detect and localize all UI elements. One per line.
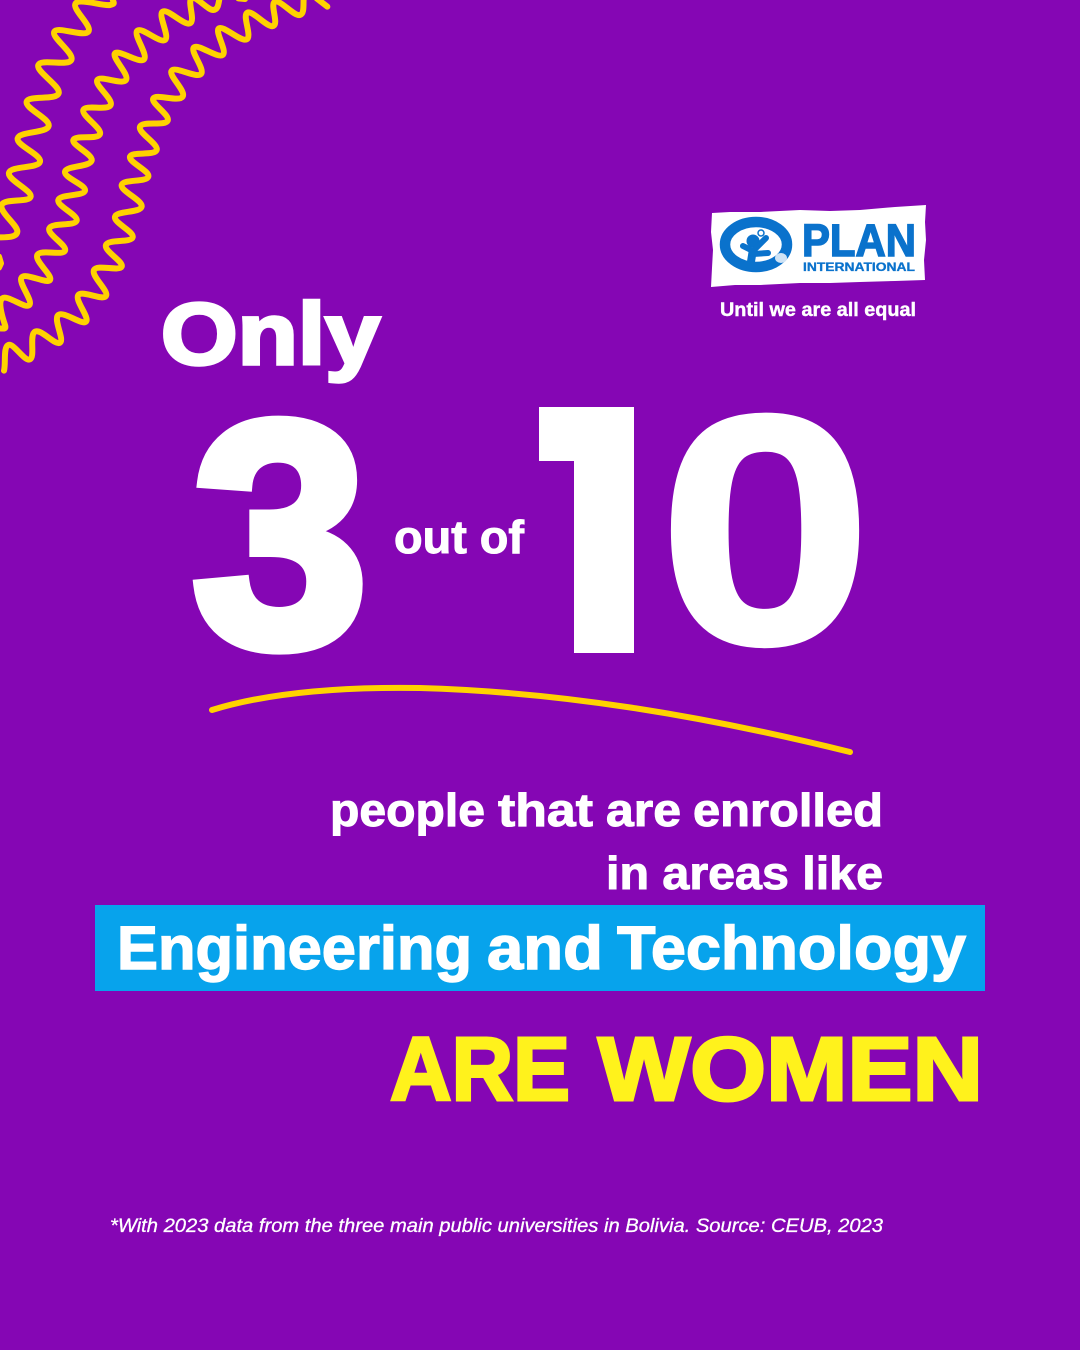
logo wordmark PLAN: PLAN	[802, 215, 916, 266]
conclusion: ARE WOMEN	[390, 1020, 983, 1120]
source footnote: *With 2023 data from the three main public universities in Bolivia. Source: CEUB, 2023	[110, 1215, 883, 1237]
subheading line 1: people	[330, 784, 485, 836]
logo tagline: Until we are all equal	[720, 300, 916, 321]
subheading line 1: that	[498, 784, 593, 836]
heading: Only: Only	[161, 286, 380, 383]
big number 1: 1	[444, 340, 751, 726]
subheading line 2: in areas like	[606, 847, 883, 899]
logo white torn background	[711, 205, 926, 287]
subheading line 1	[330, 784, 883, 836]
logo emblem ring and child	[725, 222, 787, 268]
highlight banner: Engineering	[117, 914, 472, 982]
conclusion: ARE WOMEN: WOMEN	[598, 1020, 983, 1120]
big number 0: 0	[658, 347, 873, 712]
highlight banner: and	[487, 914, 603, 982]
logo: Plan International	[711, 205, 926, 287]
yellow curved underline	[212, 688, 850, 752]
conclusion: ARE WOMEN: ARE	[390, 1020, 570, 1120]
connector text: out of: out of	[394, 511, 525, 563]
decorative zigzag lines	[0, 0, 327, 371]
highlight banner	[95, 905, 985, 991]
subheading line 1: enrolled	[693, 784, 883, 836]
logo wordmark INTERNATIONAL: INTERNATIONAL	[803, 260, 915, 274]
big number 3: 3	[192, 357, 368, 713]
subheading line 1: are	[606, 784, 681, 836]
highlight banner: Technology	[617, 914, 966, 982]
